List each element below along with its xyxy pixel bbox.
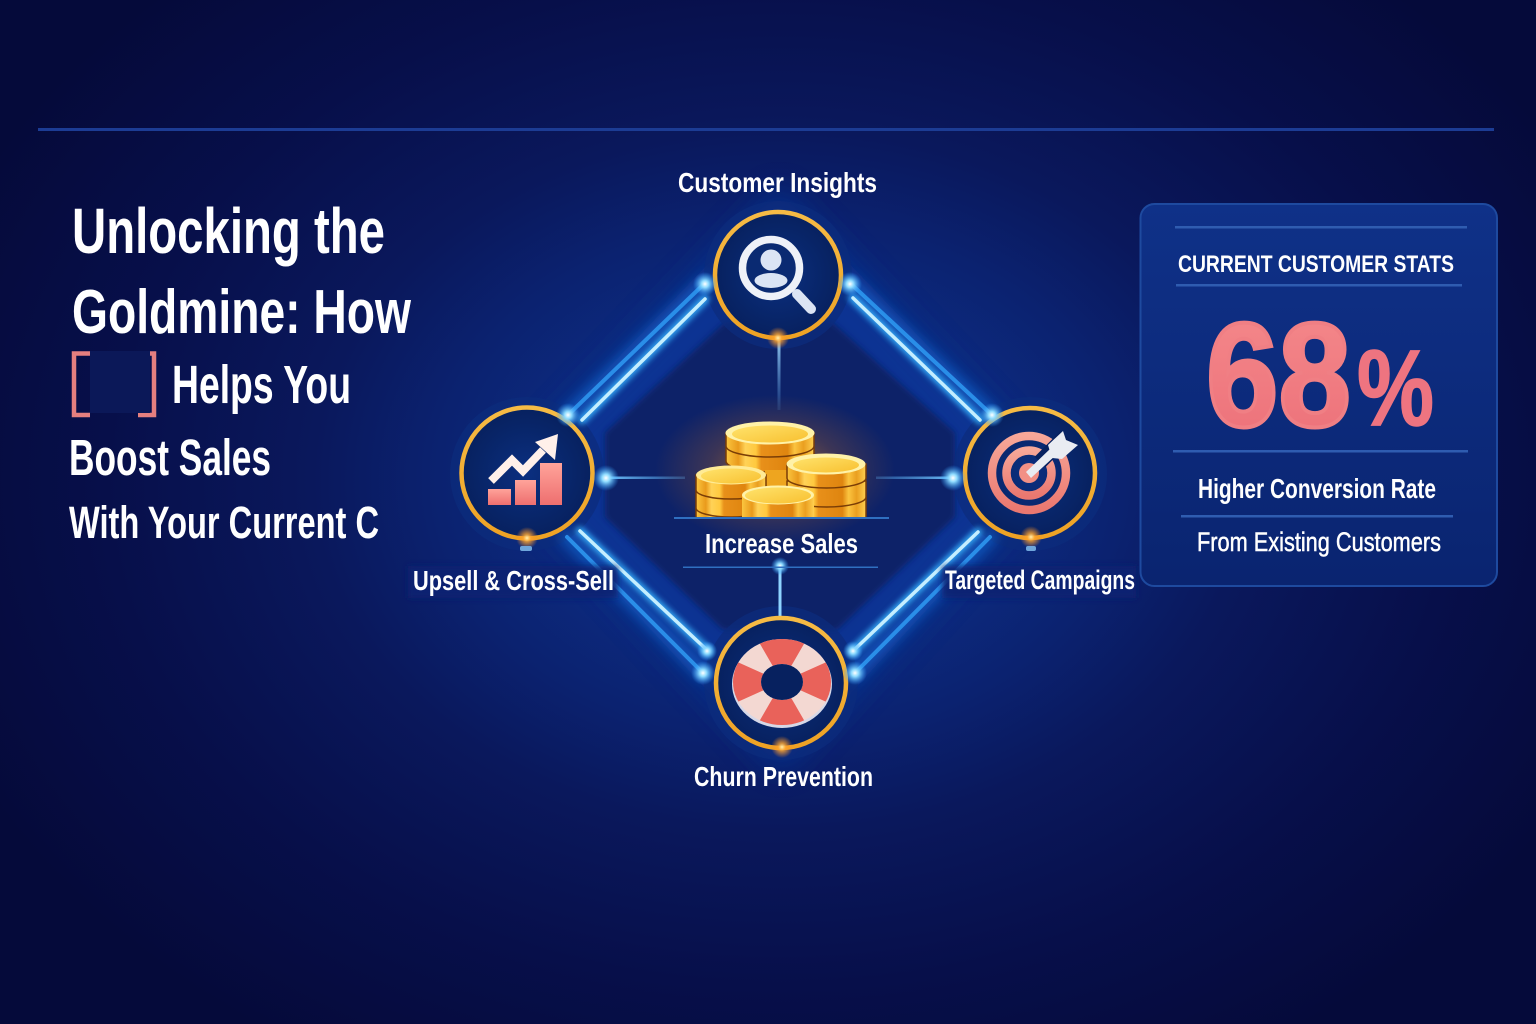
- panel: current customer stats: [1140, 204, 1497, 586]
- title block: [69, 195, 412, 548]
- center shelf line: [674, 517, 889, 519]
- connector sparkles: [556, 272, 1004, 685]
- icon: lifebuoy: [732, 639, 832, 728]
- node halos: [450, 201, 1107, 760]
- node: Upsell and Cross-Sell: [462, 408, 592, 551]
- redacted bracket placeholder: [74, 351, 154, 415]
- stats heading: CURRENT CUSTOMER STATS: [1178, 251, 1454, 278]
- title line: With Your Current C: With Your Current C: [69, 497, 379, 548]
- node: Customer Insights: [715, 212, 841, 349]
- connectors: diamond glow: [567, 283, 992, 673]
- center lower line: [683, 566, 878, 568]
- label: Upsell and Cross-Sell: Upsell & Cross-Sell: [413, 565, 614, 596]
- icon: growth chart: [488, 434, 562, 505]
- coins: left stack: [696, 475, 766, 520]
- coins: front stack: [742, 496, 814, 517]
- coins: right stack: [787, 464, 866, 525]
- big stat: 68 percent: %: [1357, 327, 1434, 448]
- diagram: inner diamond panel: [610, 327, 950, 625]
- label: Churn Prevention: Churn Prevention: [694, 761, 873, 792]
- top divider line: [38, 128, 1494, 131]
- stat caption: From Existing Customers: From Existing Customers: [1197, 527, 1441, 557]
- center label: Increase Sales: Increase Sales: [705, 528, 858, 559]
- label backing: Targeted Campaigns: [942, 566, 1136, 598]
- title line: Helps You: Helps You: [172, 355, 351, 415]
- icon: magnifier with person: [742, 240, 811, 309]
- diagram: diamond band: [507, 190, 1050, 770]
- label backing: Upsell and Cross-Sell: [408, 566, 618, 598]
- label: Customer Insights: Customer Insights: [678, 167, 877, 198]
- connectors: spokes to center: [605, 340, 956, 620]
- title line: Goldmine: How: Goldmine: How: [72, 278, 412, 347]
- coins: back stack: [726, 433, 814, 472]
- title line: Unlocking the: Unlocking the: [72, 195, 385, 267]
- title line: Boost Sales: Boost Sales: [69, 429, 271, 486]
- label: Targeted Campaigns: Targeted Campaigns: [945, 565, 1135, 595]
- icon: target with arrow: [992, 431, 1078, 510]
- center: coin stacks: [664, 401, 886, 539]
- node: Churn Prevention: [716, 618, 846, 758]
- big stat: 68 percent: 68: [1206, 293, 1351, 458]
- stat caption: Higher Conversion Rate: Higher Conversion Rate: [1198, 473, 1436, 504]
- node: Targeted Campaigns: [965, 408, 1095, 551]
